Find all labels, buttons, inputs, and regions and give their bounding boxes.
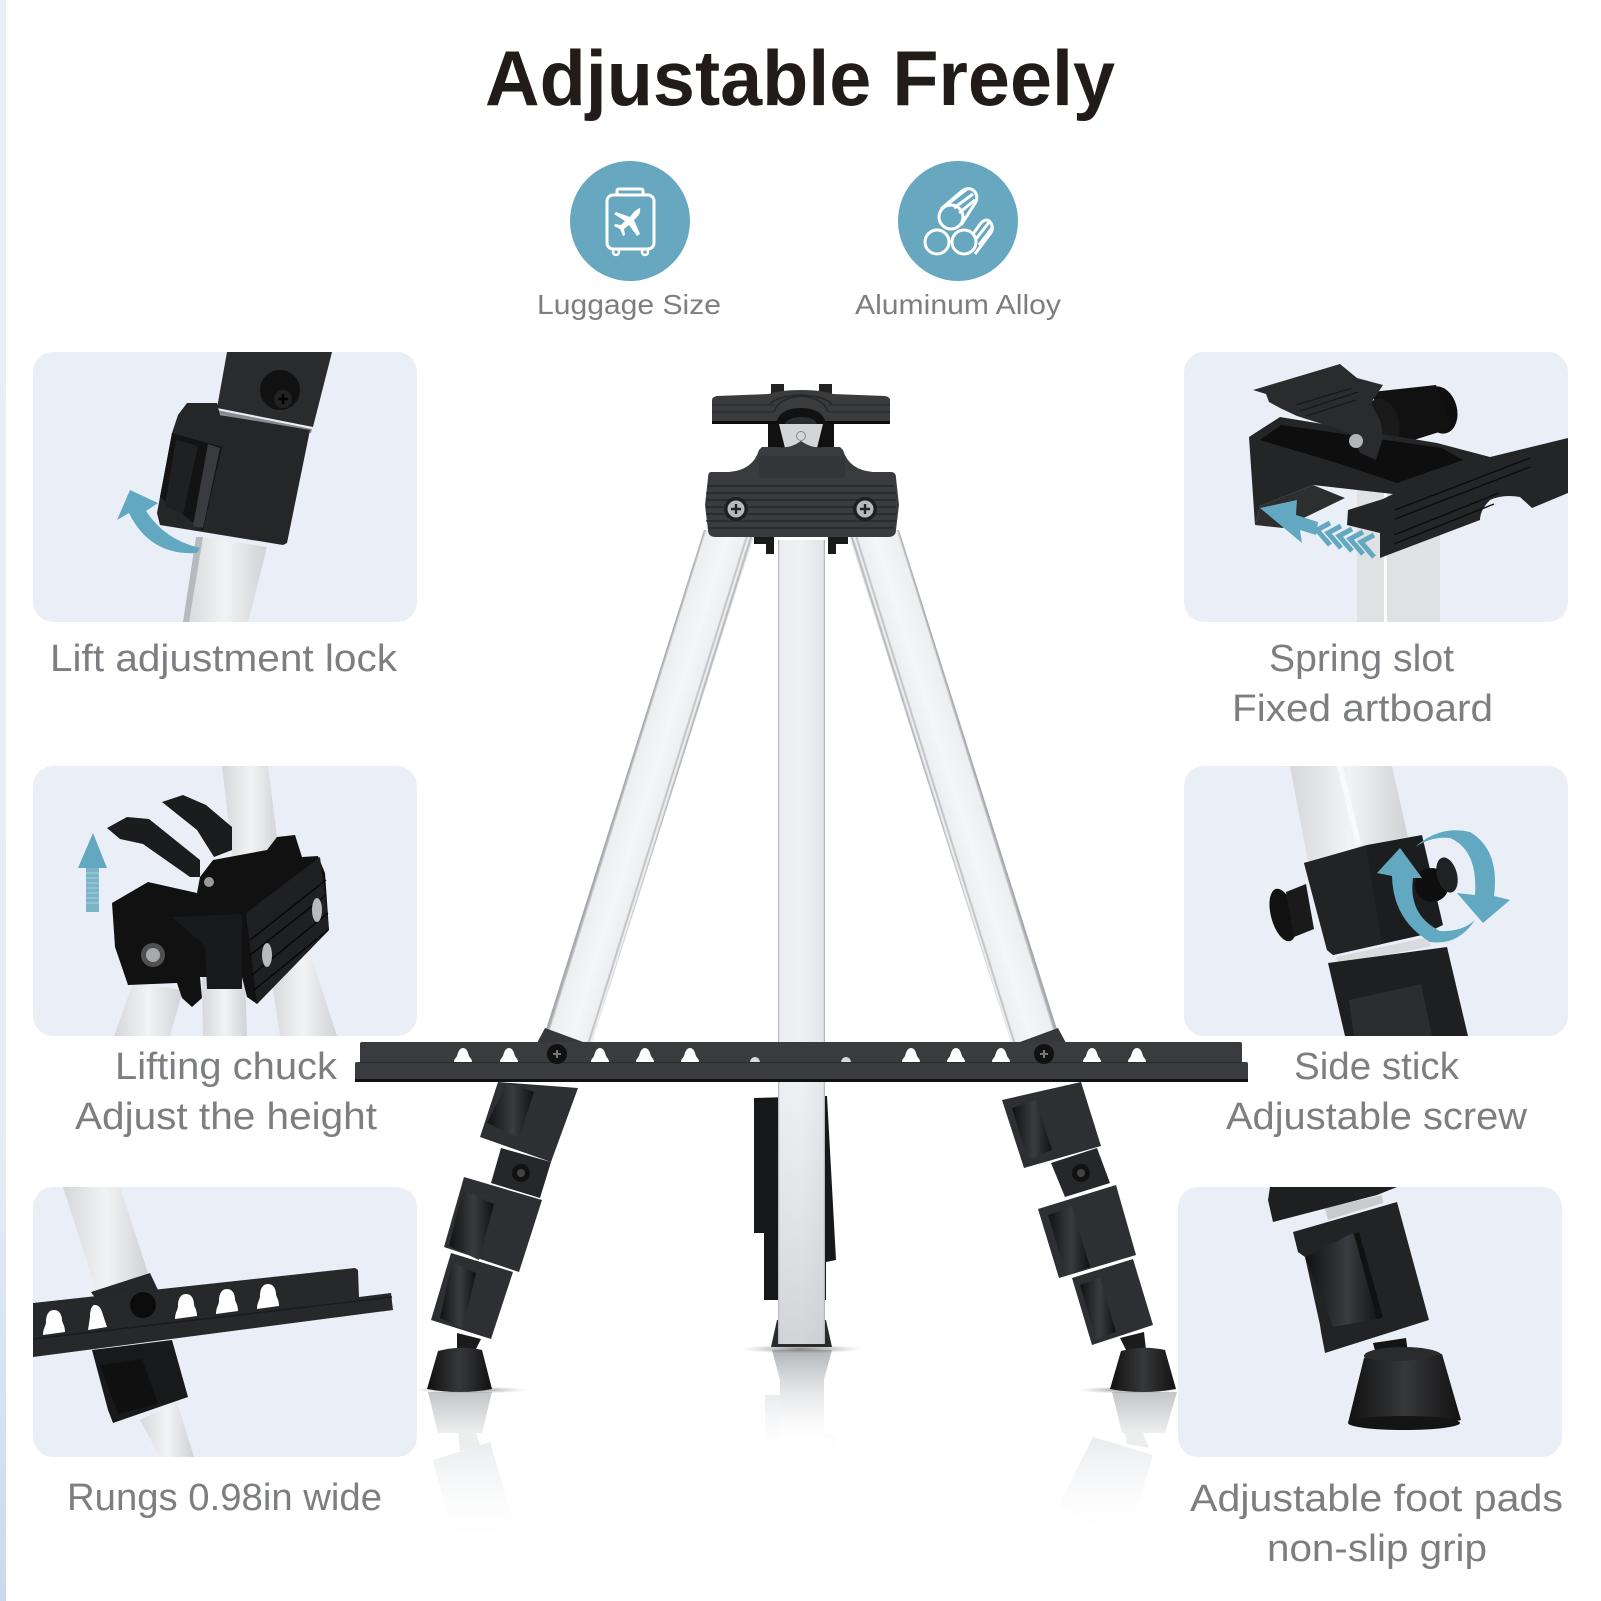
head screw right	[853, 497, 877, 521]
panel: lifting chuck	[33, 766, 417, 1138]
panel: lift adjustment lock	[33, 352, 417, 680]
right black leg sections	[1002, 1082, 1176, 1392]
caption: Adjustable screw	[1226, 1096, 1528, 1138]
label: luggage size: Luggage Size	[537, 289, 721, 320]
head screw left	[724, 497, 748, 521]
detail image: tray rung	[33, 1187, 393, 1457]
caption: non-slip grip	[1267, 1528, 1487, 1570]
tray keyholes	[454, 1048, 1146, 1062]
label: aluminum alloy: Aluminum Alloy	[855, 289, 1061, 320]
caption	[1190, 1478, 1563, 1570]
caption: Rungs 0.98in wide	[67, 1477, 382, 1519]
caption: Lifting chuck	[115, 1046, 338, 1088]
caption	[1232, 638, 1493, 730]
title: Adjustable Freely	[485, 34, 1115, 122]
right silver leg	[847, 530, 1062, 1045]
arrow: rotate screw	[1377, 830, 1510, 943]
left black leg sections	[427, 1082, 578, 1392]
icon: aluminum tubes	[898, 161, 1018, 281]
panel: side stick	[1184, 766, 1568, 1138]
panel: adjustable foot pads	[1178, 1187, 1563, 1570]
center post	[771, 540, 832, 1347]
caption	[1226, 1046, 1528, 1138]
panel: spring slot	[1184, 352, 1568, 730]
easel product illustration	[355, 384, 1248, 1547]
caption: Side stick	[1294, 1046, 1460, 1088]
left silver leg	[541, 530, 756, 1045]
head block	[705, 441, 899, 554]
arrow: rotate lock	[117, 490, 200, 553]
caption: Adjustable foot pads	[1190, 1478, 1563, 1520]
caption: Fixed artboard	[1232, 688, 1493, 730]
detail image: lifting chuck	[107, 766, 337, 1036]
detail image: spring clamp	[1249, 364, 1568, 622]
arrow: up	[78, 833, 107, 912]
top clamp	[712, 384, 890, 450]
panel: rungs width	[33, 1187, 417, 1519]
caption: Lift adjustment lock	[50, 638, 398, 680]
arrow: slide direction	[1260, 500, 1374, 557]
floor reflections	[414, 1344, 1182, 1547]
detail image: foot pad	[1268, 1187, 1461, 1430]
tray brackets	[537, 1028, 1066, 1043]
feature: aluminum alloy	[855, 161, 1061, 320]
icon: suitcase with plane	[570, 161, 690, 281]
caption: Adjust the height	[75, 1096, 377, 1138]
caption: Spring slot	[1269, 638, 1454, 680]
tray	[355, 1042, 1248, 1082]
back leg	[754, 1096, 836, 1300]
detail image: lock on leg	[157, 352, 332, 622]
feature: luggage size	[537, 161, 721, 320]
detail image: side stick	[1264, 766, 1468, 1036]
caption	[75, 1046, 377, 1138]
